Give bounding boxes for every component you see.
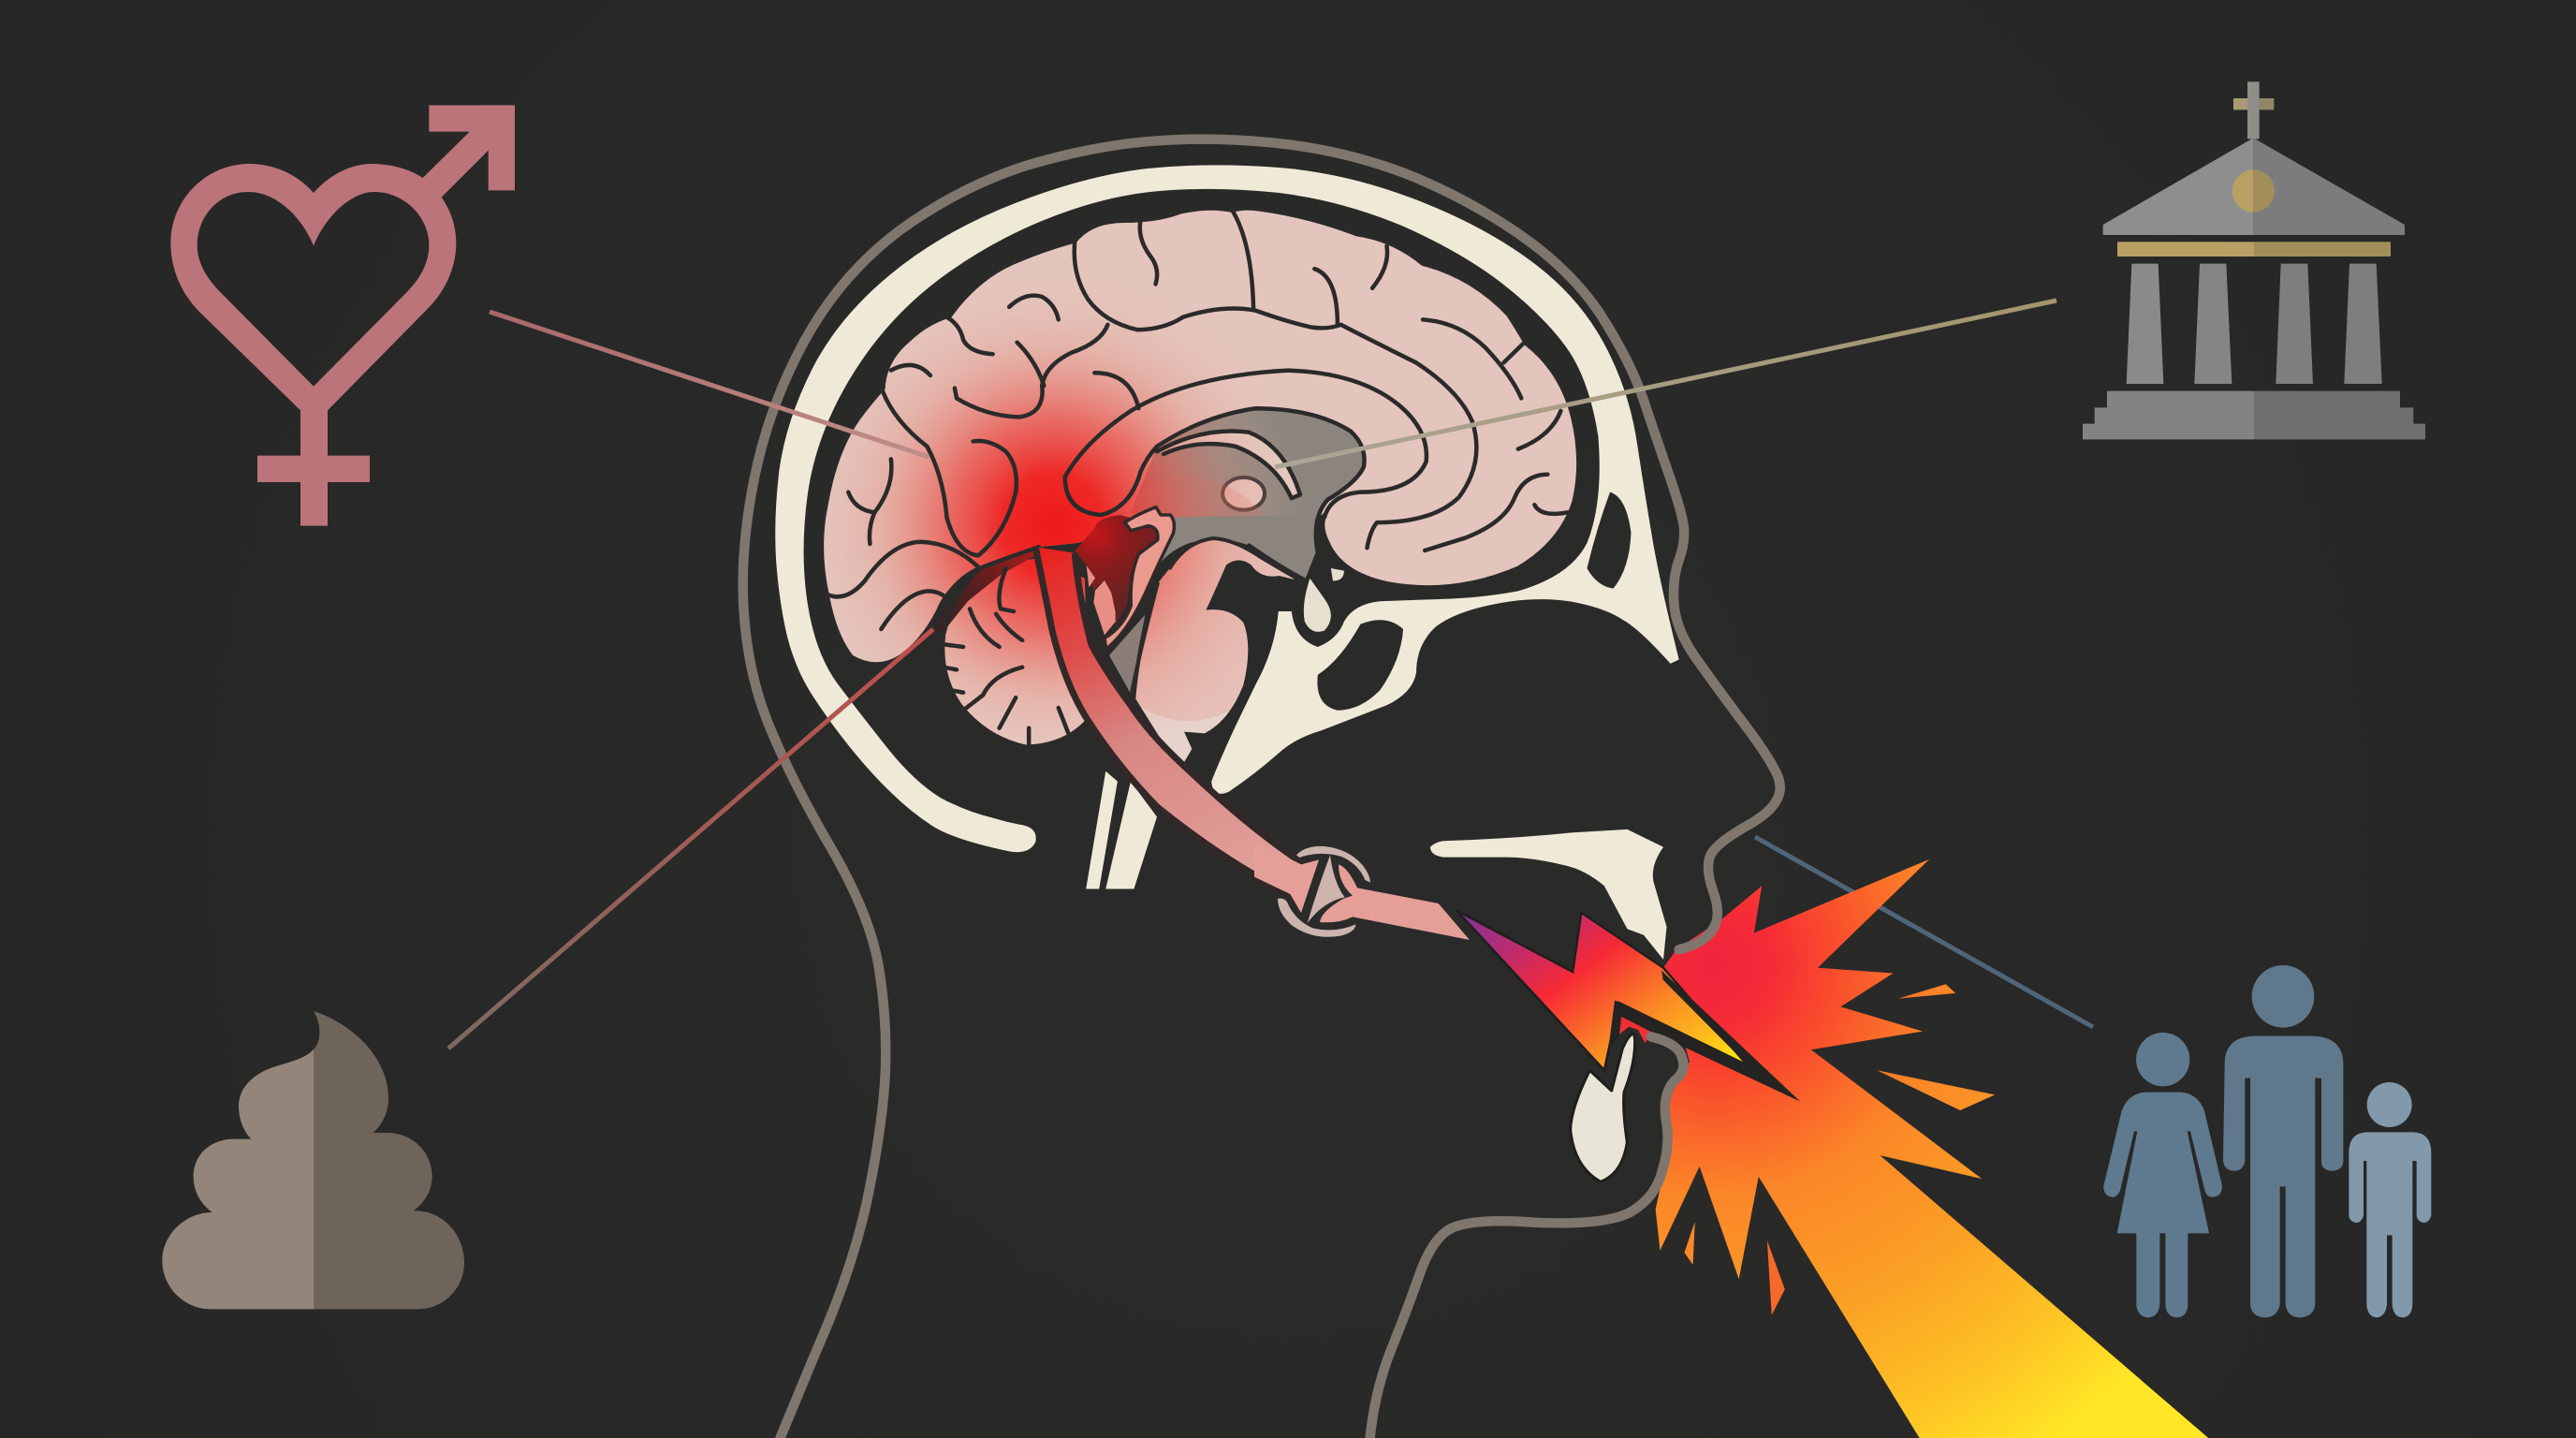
bolt shadow, red sliver and uvula — [1571, 971, 1800, 1181]
lower lip outline — [1630, 1036, 1684, 1212]
connector: family to mouth — [1755, 837, 2093, 1027]
nerve tube from brain to larynx — [1035, 547, 1300, 894]
brainstem — [1109, 538, 1301, 768]
midbrain detail — [1075, 507, 1301, 696]
upper palate — [1430, 829, 1667, 960]
icon: church — [2083, 81, 2425, 439]
icon: family — [2103, 965, 2431, 1317]
brain folds and structures — [822, 208, 1578, 747]
child — [2349, 1082, 2431, 1317]
icon: pile of dirt — [162, 1011, 464, 1309]
connector: church to brain — [1275, 301, 2056, 467]
woman — [2103, 1033, 2222, 1317]
red activation glow — [846, 317, 1290, 734]
cross — [2233, 81, 2274, 139]
connector: love symbol to brain — [490, 312, 929, 457]
larynx and end of nerve — [1254, 842, 1470, 940]
man — [2223, 965, 2343, 1317]
cerebrum — [822, 208, 1578, 665]
lightning bolt — [1456, 910, 1748, 1070]
icon: heart with male and female symbols — [170, 105, 515, 526]
skull bone — [775, 165, 1679, 889]
head outline — [743, 139, 1780, 1438]
brain — [822, 208, 1578, 747]
connector: dirt symbol to brain — [448, 629, 933, 1049]
explosion burst from the mouth — [1656, 859, 2208, 1438]
